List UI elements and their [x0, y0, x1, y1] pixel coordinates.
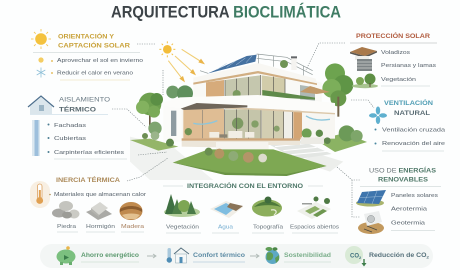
- panel: orientación y captación solar: Reducir el calor en verano: [57, 71, 133, 77]
- heading: INERCIA TÉRMICA: [56, 175, 120, 184]
- list: [374, 128, 376, 130]
- solar panels: [207, 55, 257, 74]
- left tree: [136, 93, 163, 135]
- text: [49, 194, 51, 195]
- panel: protección solar: [350, 32, 437, 88]
- heading: INTEGRACIÓN CON EL ENTORNO: [187, 182, 303, 190]
- panel: integración con el entorno: Topografía: [253, 225, 283, 231]
- deck: [182, 138, 300, 151]
- icon: overhang: [350, 47, 377, 60]
- panel: inercia térmica: Madera: [121, 224, 144, 230]
- labels: Vegetación: [166, 225, 199, 231]
- panel: benefits bar: [40, 244, 433, 268]
- heading: AISLAMIENTO: [59, 96, 110, 103]
- foreground lawn: [173, 149, 327, 175]
- icon: concrete: [86, 202, 112, 220]
- right garden: [300, 125, 367, 172]
- panel: ventilación natural: [369, 98, 446, 151]
- list: Paneles solares: [391, 193, 438, 199]
- icon: water: [210, 201, 243, 218]
- chimney: [291, 58, 297, 70]
- labels: Piedra: [57, 224, 76, 230]
- right tree: [322, 63, 353, 117]
- ground floor: [163, 103, 335, 151]
- panel: integración con el entorno: [163, 182, 339, 233]
- left lawn: [130, 139, 178, 151]
- icon: CO2 down: 2: [359, 255, 362, 260]
- panel: ventilación natural: Ventilación cruzada: [382, 128, 446, 134]
- list: [48, 124, 50, 153]
- icon: trees: [352, 74, 378, 88]
- icon: fan: [369, 106, 387, 124]
- panel: aislamiento térmico: TÉRMICO: [59, 104, 96, 113]
- icon: house section: [28, 96, 54, 114]
- middle slab: [163, 95, 335, 113]
- icon: snowflake: [37, 68, 45, 78]
- upper floor: [193, 71, 322, 104]
- icon: CO2 down: CO: [350, 254, 359, 260]
- panel: uso de energías renovables: RENOVABLES: [378, 176, 428, 184]
- terrace furniture: [209, 131, 254, 138]
- list: Voladizos: [381, 50, 410, 56]
- icon: insulation bar: [32, 120, 40, 156]
- panel: integración con el entorno: Espacios abiertos: [290, 225, 339, 231]
- sun rays: [168, 49, 205, 82]
- awning: [300, 86, 330, 94]
- benefit: reducción: Reducción de CO: [369, 253, 419, 259]
- panel: aislamiento térmico: [28, 96, 127, 159]
- panel: aislamiento térmico: Fachadas: [54, 123, 86, 129]
- panel: inercia térmica: Materiales que almacenan calor: [54, 192, 146, 198]
- icon: vegetation: [164, 194, 200, 217]
- panel: uso de energías renovables: [356, 165, 441, 234]
- panel: orientación y captación solar: CAPTACIÓN SOLAR: [58, 40, 130, 50]
- pergola: [181, 103, 247, 110]
- leader lines: [112, 43, 374, 217]
- rear trees: [166, 85, 193, 101]
- icon: CO2 down: [345, 246, 366, 266]
- icon: wood: [120, 202, 142, 220]
- roof slab: [193, 63, 317, 83]
- icon: topography: [252, 196, 282, 216]
- panel: inercia térmica: [30, 175, 146, 232]
- house illustration: [130, 41, 367, 180]
- arrow: [147, 254, 156, 258]
- title: ARQUITECTURA BIOCLIMÁTICA: [111, 2, 341, 22]
- panel: protección solar: Vegetación: [381, 77, 416, 83]
- benefit: reducción: 2: [426, 254, 430, 259]
- panel: uso de energías renovables: Aerotermia: [391, 206, 428, 212]
- air flow arrows: [193, 116, 330, 124]
- list: Aprovechar el sol en invierno: [57, 58, 143, 64]
- sun: [159, 41, 175, 57]
- panel: protección solar: Persianas y lamas: [381, 63, 436, 69]
- panel: integración con el entorno: Agua: [218, 225, 233, 231]
- heading: PROTECCIÓN SOLAR: [356, 32, 431, 40]
- heading: ORIENTACIÓN Y: [58, 32, 115, 40]
- panel: uso de energías renovables: Geotermia: [391, 220, 426, 226]
- balcony planter: [262, 90, 315, 100]
- icon: thermometer: [30, 181, 50, 208]
- panel: aislamiento térmico: Carpinterías eficientes: [54, 150, 124, 156]
- icon: globe: [266, 247, 280, 264]
- benefit: ahorro: Ahorro energético: [81, 253, 139, 259]
- icon: piggy bank: [56, 246, 76, 265]
- arrow: [250, 254, 259, 258]
- icon: stones: [52, 201, 80, 218]
- icon: shutter: [357, 59, 372, 71]
- panel: inercia térmica: Hormigón: [86, 224, 115, 230]
- benefit: sostenibilidad: Sostenibilidad: [284, 253, 331, 259]
- panel: orientación y captación solar: [31, 29, 143, 80]
- panel: aislamiento térmico: Cubiertas: [54, 136, 86, 142]
- shrubs: [142, 128, 331, 163]
- right steps: [268, 141, 332, 159]
- icon: solar panels: [356, 190, 386, 206]
- heading: USO DE ENERGÍAS: [369, 165, 436, 174]
- icon: small sun: [38, 57, 44, 63]
- path and paving: [130, 137, 213, 180]
- benefit: confort: Confort térmico: [193, 253, 245, 259]
- roof railing: [200, 54, 313, 75]
- icon: open spaces: [297, 196, 331, 219]
- icon: sun: [31, 29, 51, 49]
- icon: heat pump: [358, 211, 384, 234]
- panel: ventilación natural: NATURAL: [394, 110, 430, 117]
- heading: VENTILACIÓN: [384, 98, 433, 107]
- panel: ventilación natural: Renovación del aire: [382, 141, 445, 147]
- icon: thermometer and house: [167, 248, 189, 263]
